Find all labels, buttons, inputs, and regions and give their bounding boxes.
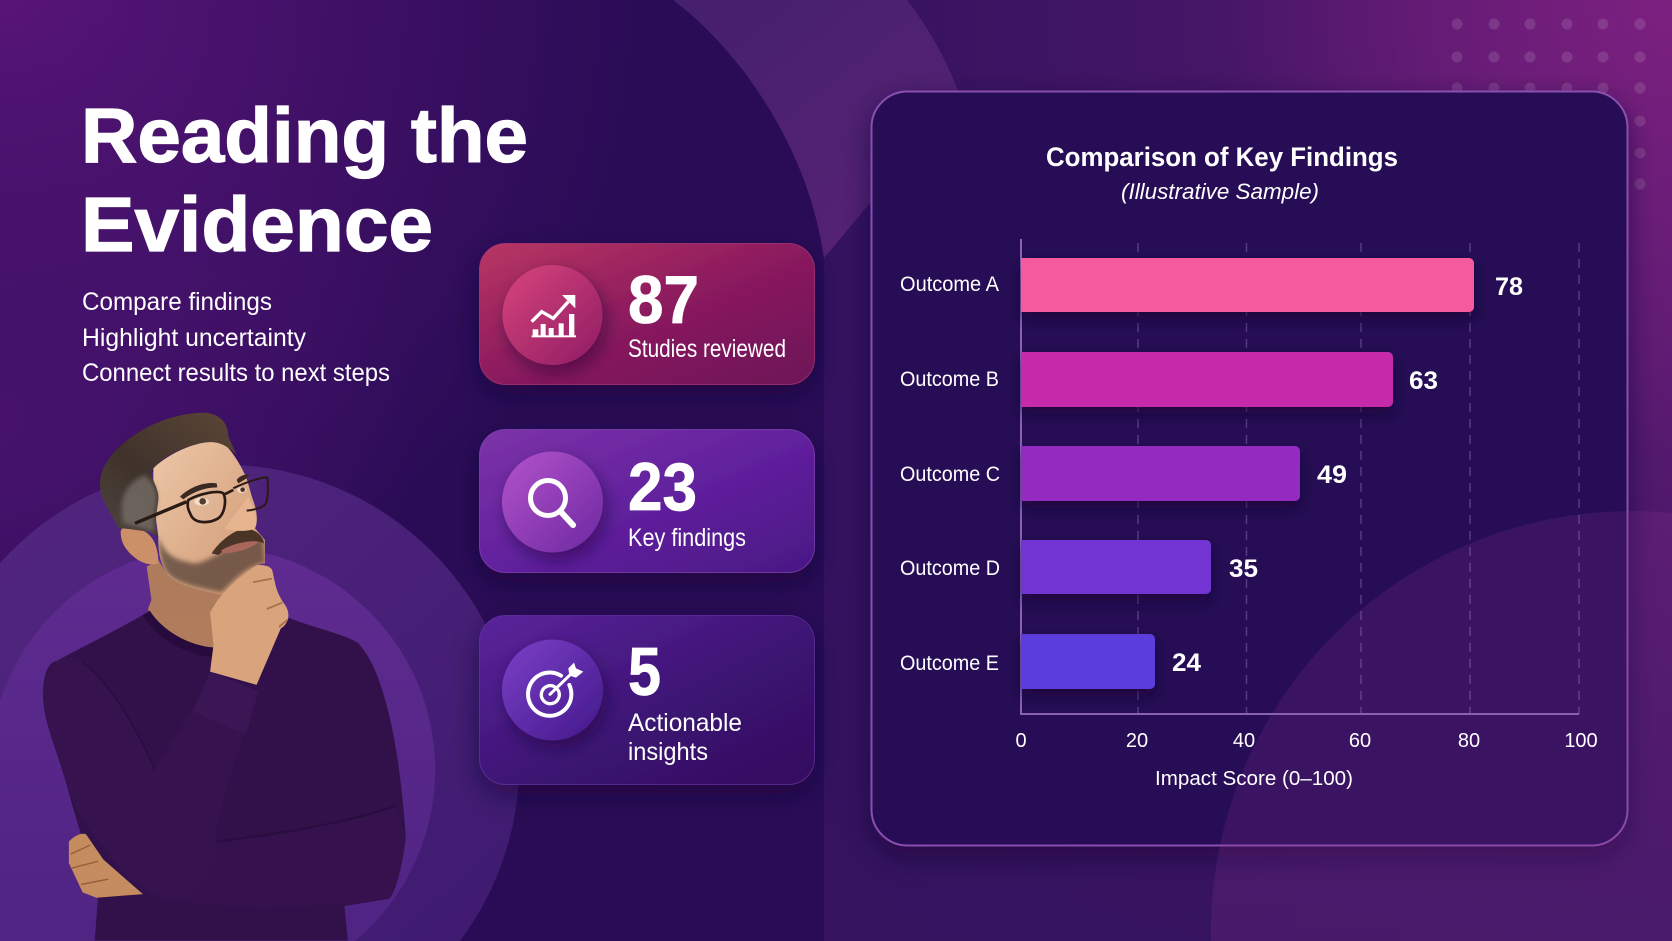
title [81,93,528,268]
bullet text: Connect results to next steps [82,359,390,387]
chart heading: (Illustrative Sample) [1121,179,1319,204]
stat card: actionable insights: 5 [628,634,661,710]
x axis tick labels: 20 [1126,730,1148,752]
chart heading [1046,142,1398,204]
stat card: studies reviewed: Studies reviewed [628,335,786,363]
bullet text [82,288,390,387]
stat card: key findings [480,430,814,572]
bar: outcome D: Outcome D [900,557,1000,580]
person: nose shade [225,497,257,531]
chart heading: Comparison of Key Findings [1046,142,1398,172]
person: left hand under arm [69,834,143,898]
bar: outcome E: Outcome E [900,652,999,675]
stat card: key findings: Key findings [628,524,746,552]
icon: target with arrow [502,640,603,740]
stat card: actionable insights: insights [628,738,708,766]
bar: outcome B: 63 [1409,367,1438,395]
bar: outcome B: Outcome B [900,368,999,391]
x axis title: Impact Score (0–100) [1155,768,1353,790]
background: dark left panel [0,0,824,941]
icon: magnifier [502,452,603,552]
person: horizontal forearm [165,806,406,907]
panel: chart card [872,92,1672,941]
bullet text: Highlight uncertainty [82,324,306,352]
bar: outcome A [900,258,1523,312]
bullet text: Compare findings [82,288,272,316]
stat card: actionable insights [480,616,814,784]
person illustration [43,413,406,941]
bar: outcome C: 49 [1317,461,1347,489]
background: left panel glow [0,0,824,941]
x axis tick labels [1015,730,1598,752]
icon: growth chart [502,265,602,365]
x axis tick labels: 0 [1015,730,1027,752]
x axis tick labels: 60 [1349,730,1371,752]
background: dot pattern [1452,18,1646,190]
title: Reading the [81,93,528,179]
bar: outcome D [900,540,1258,594]
person: hand on chin [210,565,288,685]
person: beard [158,537,265,593]
bar: outcome B [900,352,1438,407]
person: glasses [135,477,268,523]
bar: outcome A: Outcome A [900,273,999,296]
person: eyebrows and eyes [180,483,217,499]
person: body and sweater [43,565,406,941]
bar: outcome E: 24 [1172,649,1201,677]
person: hair [100,413,237,537]
backdrop circles behind person [0,464,519,941]
title: Evidence [81,182,433,268]
stat card: studies reviewed: 87 [628,262,699,338]
bar: outcome E [900,634,1201,689]
x axis tick labels: 80 [1458,730,1480,752]
bar: outcome A: 78 [1495,273,1523,301]
bar: outcome D: 35 [1229,555,1258,583]
stat card: actionable insights: Actionable [628,709,742,737]
x axis tick labels: 100 [1564,730,1598,752]
bar: outcome C: Outcome C [900,463,1000,486]
person: raised arm sleeve [43,658,258,899]
bottom-right decorative circle [1211,511,1672,941]
background: light crescent shape [673,0,1000,258]
bar chart [900,239,1598,790]
person: head [100,413,268,617]
stat card: key findings: 23 [628,449,697,525]
stat card: studies reviewed [480,244,814,384]
x axis tick labels: 40 [1233,730,1255,752]
bar: outcome C [900,446,1347,501]
